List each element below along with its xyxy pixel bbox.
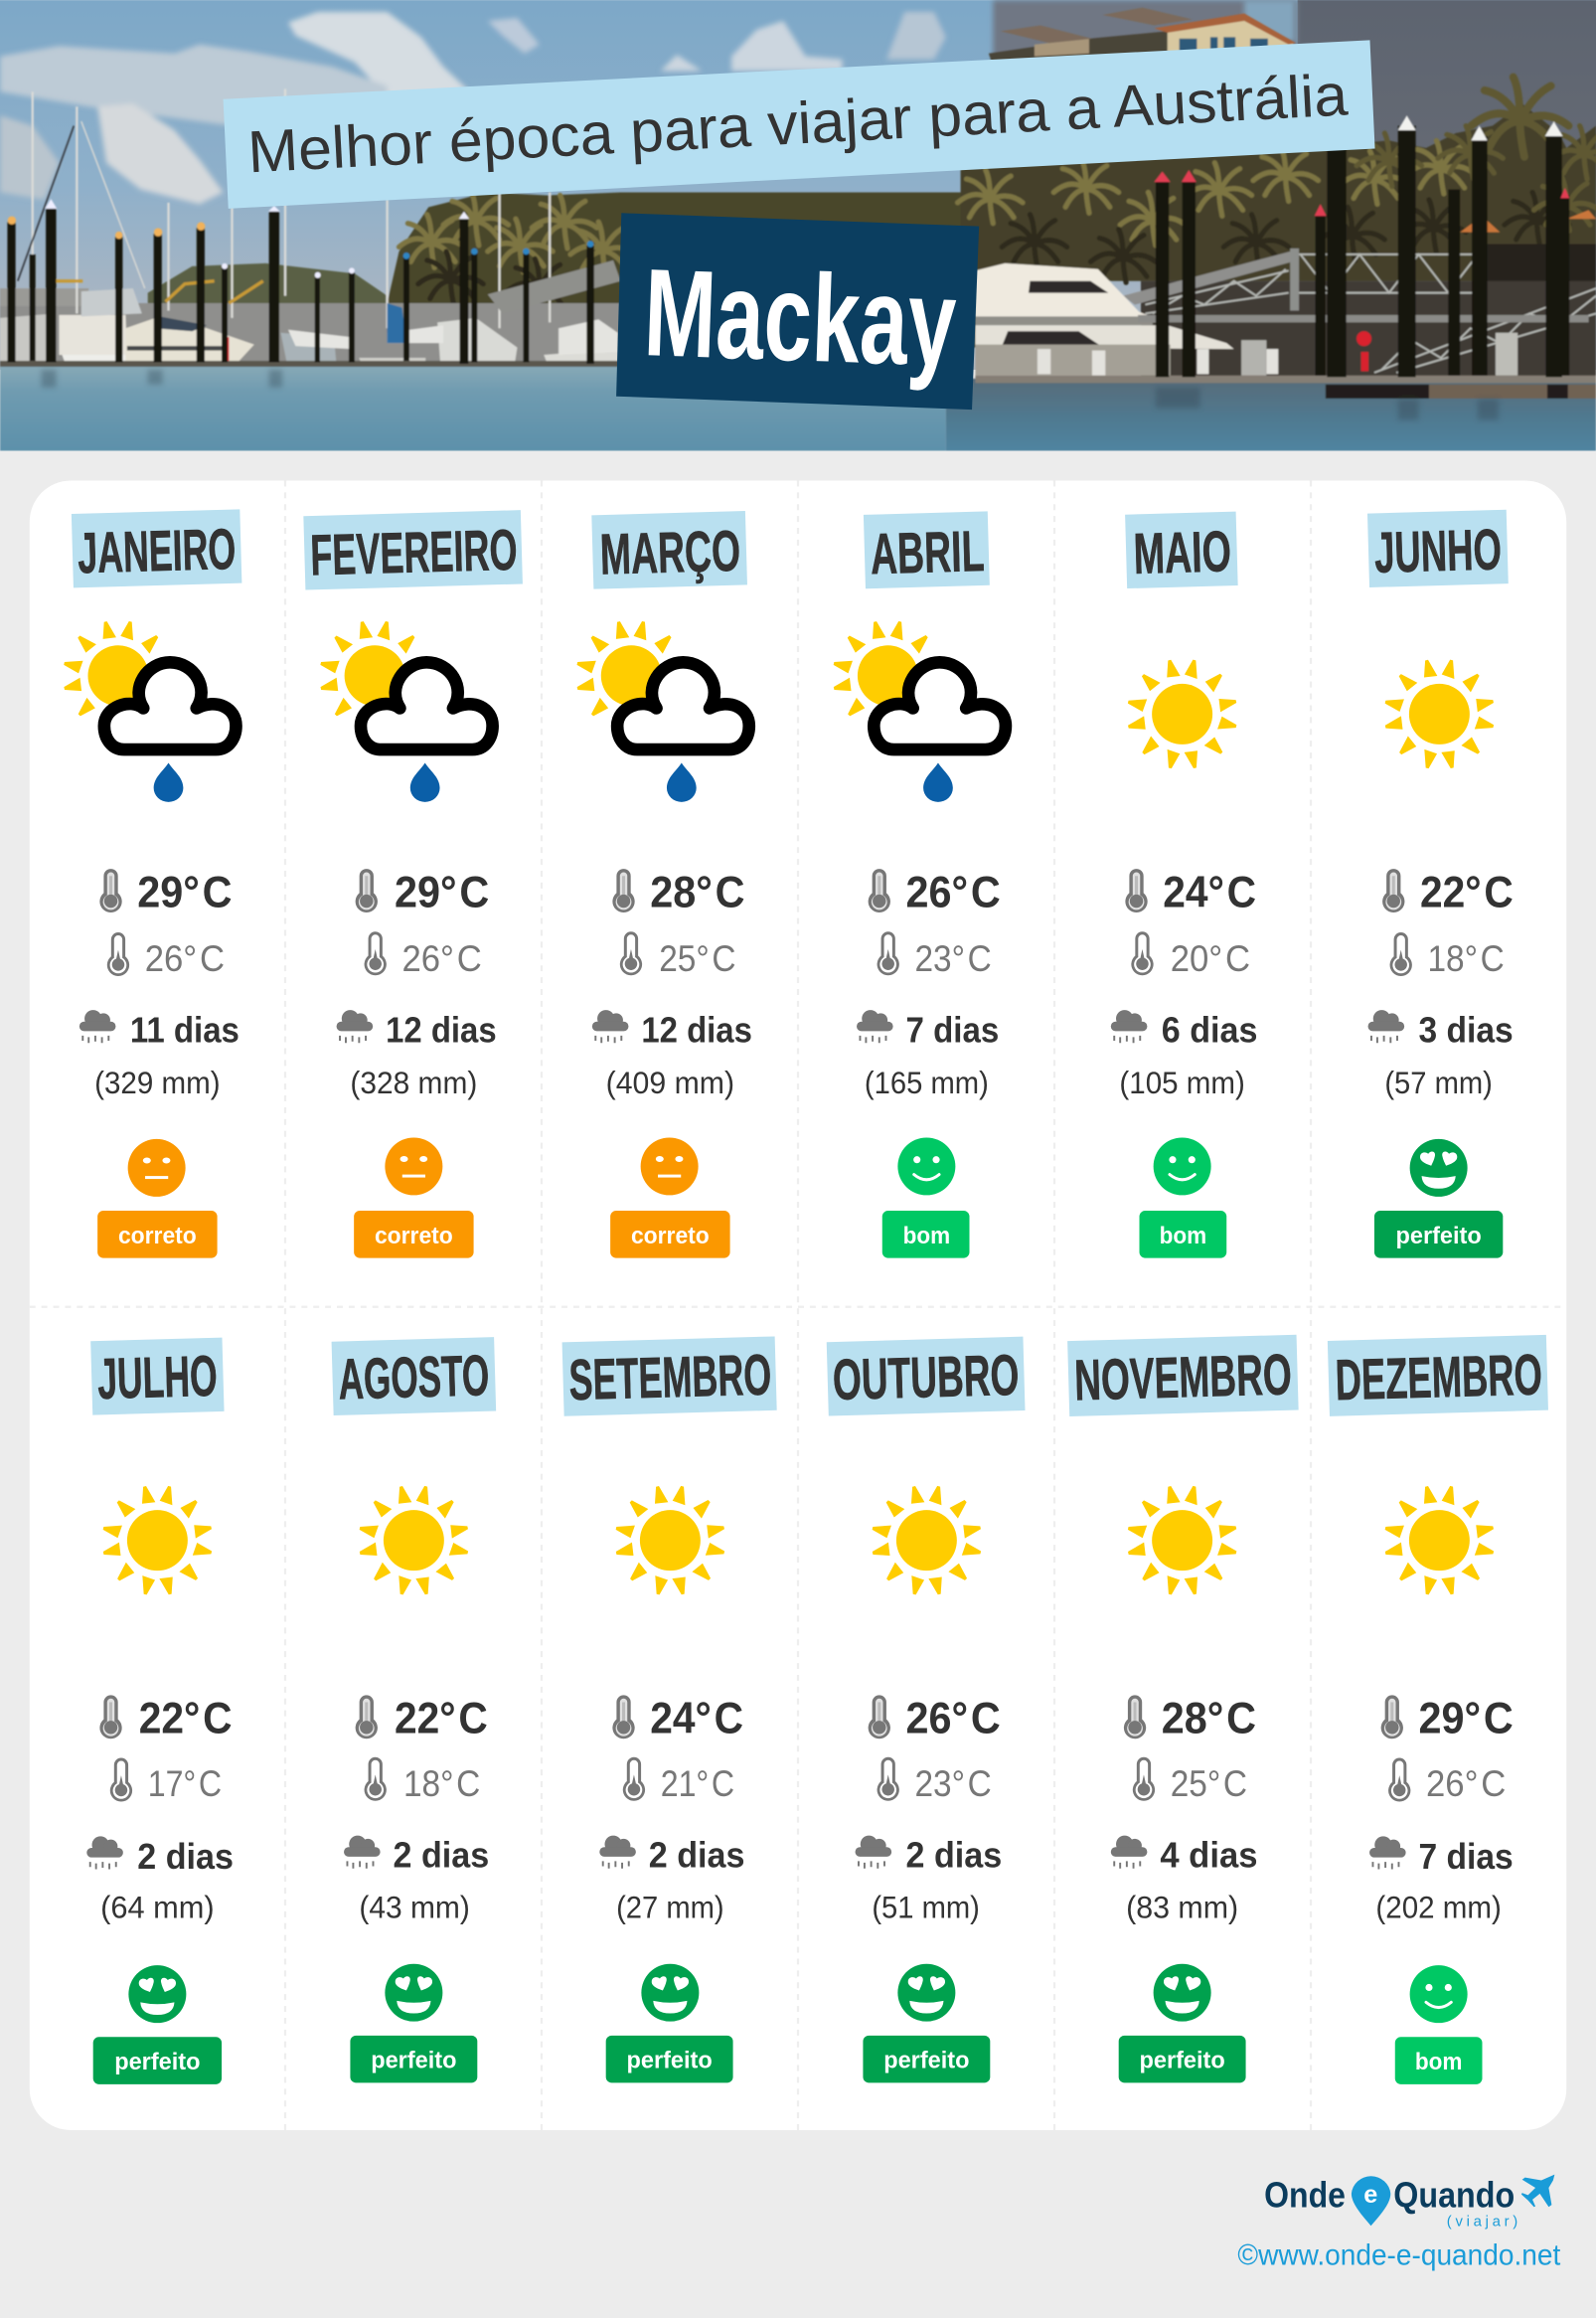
icon: happy face bbox=[1410, 1965, 1468, 2023]
icon: neutral face bbox=[385, 1137, 442, 1195]
icon: high temperature bbox=[1382, 869, 1404, 912]
icon: low temperature bbox=[1131, 931, 1154, 975]
icon: sun bbox=[1127, 659, 1237, 769]
cell: agosto bbox=[332, 1337, 496, 2082]
icon: sun bbox=[102, 1485, 213, 1595]
rating badge bbox=[1395, 2037, 1482, 2084]
high temperature: 26°C bbox=[906, 868, 1001, 916]
low temperature: 26°C bbox=[1426, 1762, 1506, 1804]
icon: high temperature bbox=[356, 1695, 378, 1738]
icon: low temperature bbox=[365, 931, 387, 975]
cell: março bbox=[575, 511, 752, 1258]
month label: MAIO bbox=[1133, 520, 1232, 586]
high temperature: 29°C bbox=[395, 868, 489, 916]
icon: high temperature bbox=[99, 1695, 122, 1738]
walkway and truss bbox=[1123, 251, 1298, 304]
low temperature: 21°C bbox=[661, 1762, 734, 1804]
rating badge: correto bbox=[375, 1223, 453, 1249]
icon: low temperature bbox=[365, 1757, 387, 1801]
icon: rain bbox=[592, 1010, 628, 1043]
rainy days: 12 dias bbox=[386, 1011, 497, 1051]
month label: NOVEMBRO bbox=[1073, 1343, 1293, 1412]
month label: FEVEREIRO bbox=[310, 519, 518, 588]
month label: JULHO bbox=[96, 1345, 219, 1411]
rainy days: 4 dias bbox=[1160, 1835, 1257, 1875]
icon: happy face bbox=[1154, 1137, 1211, 1195]
icon: sun bbox=[1384, 1485, 1495, 1595]
cell: julho bbox=[86, 1338, 234, 2084]
icon: neutral face bbox=[641, 1137, 699, 1195]
icon: neutral face bbox=[128, 1139, 186, 1197]
month label: SETEMBRO bbox=[568, 1344, 772, 1412]
icon: low temperature bbox=[878, 931, 899, 975]
icon: delighted face bbox=[641, 1964, 699, 2022]
icon: sun bbox=[1127, 1485, 1237, 1595]
rating badge: bom bbox=[1160, 1223, 1206, 1249]
cell: novembro bbox=[1067, 1335, 1299, 2082]
high temperature: 29°C bbox=[137, 868, 232, 916]
logo word: Onde: Onde bbox=[1264, 2175, 1346, 2215]
icon: high temperature bbox=[1125, 869, 1148, 912]
high temperature: 26°C bbox=[906, 1695, 1001, 1743]
rating badge bbox=[1140, 1211, 1226, 1258]
month label bbox=[90, 1338, 225, 1415]
logo: Onde e Quando viajar bbox=[1264, 2175, 1554, 2231]
title banner bbox=[224, 40, 1375, 209]
low temperature: 25°C bbox=[1171, 1762, 1247, 1804]
icon: rain bbox=[337, 1010, 373, 1043]
icon: delighted face bbox=[1154, 1964, 1211, 2022]
month label: ABRIL bbox=[870, 520, 985, 586]
icon: rain bbox=[599, 1836, 636, 1869]
month label: JUNHO bbox=[1373, 518, 1503, 585]
rainy days: 2 dias bbox=[137, 1837, 234, 1877]
icon: low temperature bbox=[110, 1758, 132, 1802]
month label: MARÇO bbox=[599, 520, 741, 587]
rainy days: 12 dias bbox=[641, 1011, 752, 1051]
rainfall: (105 mm) bbox=[1119, 1066, 1245, 1100]
panel: monthly climate card bbox=[30, 480, 1566, 2130]
rainfall: (328 mm) bbox=[350, 1066, 477, 1100]
month label: OUTUBRO bbox=[832, 1344, 1020, 1412]
rainfall: (83 mm) bbox=[1126, 1891, 1238, 1925]
header photo: marina bbox=[0, 0, 1596, 455]
icon: sun and rain cloud bbox=[575, 620, 749, 802]
month label bbox=[303, 510, 523, 590]
high temperature: 28°C bbox=[1162, 1695, 1256, 1743]
rating badge: perfeito bbox=[114, 2049, 200, 2075]
rating badge: perfeito bbox=[371, 2048, 456, 2074]
orange cranes bbox=[57, 281, 263, 303]
low temperature: 18°C bbox=[403, 1762, 480, 1804]
icon: high temperature bbox=[99, 869, 122, 912]
high temperature: 22°C bbox=[1420, 868, 1514, 916]
boats bbox=[0, 313, 57, 361]
low temperature: 23°C bbox=[914, 1762, 992, 1804]
month label bbox=[72, 509, 241, 587]
website url: ©www.onde-e-quando.net bbox=[1237, 2238, 1561, 2271]
mooring poles bbox=[7, 126, 1569, 377]
rainfall: (329 mm) bbox=[94, 1066, 221, 1100]
icon: happy face bbox=[897, 1137, 955, 1195]
low temperature: 26°C bbox=[145, 937, 225, 979]
high temperature: 24°C bbox=[1163, 868, 1256, 916]
icon: sun and rain cloud bbox=[63, 620, 236, 802]
rainy days: 2 dias bbox=[906, 1835, 1002, 1875]
rating badge bbox=[610, 1211, 730, 1258]
icon: high temperature bbox=[869, 869, 890, 912]
tree lines bbox=[148, 263, 388, 318]
rating badge: perfeito bbox=[883, 2048, 969, 2074]
icon: high temperature bbox=[869, 1695, 890, 1738]
cell: abril bbox=[833, 511, 1006, 1258]
cell: junho bbox=[1367, 510, 1514, 1258]
high temperature: 29°C bbox=[1419, 1695, 1514, 1743]
month label bbox=[591, 511, 747, 589]
clouds bbox=[0, 12, 946, 204]
distant boats band bbox=[0, 303, 621, 362]
city name: Mackay bbox=[642, 244, 958, 393]
low temperature: 20°C bbox=[1171, 937, 1250, 979]
rainfall: (51 mm) bbox=[872, 1891, 980, 1925]
rating badge: correto bbox=[631, 1223, 710, 1249]
cell: fevereiro bbox=[303, 510, 523, 1258]
city name banner bbox=[616, 213, 979, 410]
cell: janeiro bbox=[63, 509, 241, 1258]
icon: rain bbox=[857, 1010, 893, 1043]
icon: sun and rain cloud bbox=[833, 620, 1006, 802]
icon: delighted face bbox=[897, 1964, 955, 2022]
rating badge bbox=[354, 1211, 474, 1258]
icon: low temperature bbox=[878, 1757, 899, 1801]
icon: high temperature bbox=[356, 869, 378, 912]
icon: sun and rain cloud bbox=[319, 620, 493, 802]
rating badge bbox=[1119, 2036, 1246, 2082]
logo word: Quando: Quando bbox=[1393, 2175, 1515, 2215]
month label bbox=[1367, 510, 1509, 587]
icon: map pin bbox=[1352, 2176, 1390, 2226]
month label bbox=[332, 1337, 496, 1415]
rating badge bbox=[350, 2036, 477, 2082]
title text: Melhor época para viajar para a Austrália bbox=[246, 61, 1351, 185]
rainfall: (57 mm) bbox=[1384, 1066, 1493, 1100]
rainy days: 2 dias bbox=[394, 1835, 489, 1875]
month label: AGOSTO bbox=[338, 1344, 490, 1412]
rating badge: bom bbox=[1415, 2049, 1462, 2075]
icon: sun bbox=[615, 1485, 725, 1595]
rating badge bbox=[1374, 1211, 1503, 1258]
icon: delighted face bbox=[1410, 1139, 1468, 1197]
low temperature: 18°C bbox=[1427, 937, 1505, 979]
rating badge: perfeito bbox=[1140, 2048, 1225, 2074]
icon: sun bbox=[359, 1485, 469, 1595]
cell: maio bbox=[1111, 512, 1257, 1258]
icon: rain bbox=[1111, 1010, 1147, 1043]
rainy days: 3 dias bbox=[1419, 1011, 1514, 1051]
cell: outubro bbox=[827, 1337, 1026, 2082]
high temperature: 22°C bbox=[395, 1695, 488, 1743]
icon: sun bbox=[872, 1485, 982, 1595]
icon: delighted face bbox=[385, 1964, 442, 2022]
low temperature: 23°C bbox=[914, 937, 992, 979]
high temperature: 22°C bbox=[139, 1695, 232, 1743]
rating badge bbox=[93, 2037, 222, 2084]
icon: rain bbox=[1111, 1836, 1147, 1869]
icon: delighted face bbox=[128, 1965, 186, 2023]
rainy days: 11 dias bbox=[130, 1011, 239, 1051]
rainy days: 7 dias bbox=[1419, 1837, 1514, 1877]
rating badge bbox=[882, 1211, 969, 1258]
rating badge: correto bbox=[118, 1223, 197, 1249]
month label bbox=[827, 1337, 1026, 1416]
rainy days: 6 dias bbox=[1162, 1011, 1257, 1051]
month label bbox=[1125, 512, 1238, 588]
rainfall: (27 mm) bbox=[616, 1891, 724, 1925]
icon: rain bbox=[1369, 1836, 1406, 1870]
month label: JANEIRO bbox=[77, 518, 237, 585]
icon: airplane bbox=[1521, 2175, 1554, 2207]
icon: low temperature bbox=[107, 932, 129, 976]
rating badge bbox=[97, 1211, 218, 1258]
moored motor yacht bbox=[975, 263, 1168, 322]
icon: high temperature bbox=[612, 869, 635, 912]
high temperature: 28°C bbox=[650, 868, 744, 916]
rocks behind the dock bbox=[1141, 281, 1596, 379]
icon: high temperature bbox=[612, 1695, 635, 1738]
icon: rain bbox=[1368, 1010, 1404, 1043]
rating badge bbox=[863, 2036, 990, 2082]
rainy days: 2 dias bbox=[649, 1835, 744, 1875]
rainy days: 7 dias bbox=[906, 1011, 999, 1051]
icon: low temperature bbox=[1133, 1757, 1155, 1801]
month label bbox=[864, 511, 990, 588]
rainfall: (64 mm) bbox=[100, 1891, 215, 1925]
low temperature: 25°C bbox=[659, 937, 736, 979]
icon: rain bbox=[80, 1010, 115, 1043]
low temperature: 17°C bbox=[148, 1762, 222, 1804]
rainfall: (43 mm) bbox=[359, 1891, 470, 1925]
month label bbox=[1067, 1335, 1299, 1416]
rainfall: (409 mm) bbox=[606, 1066, 734, 1100]
icon: high temperature bbox=[1124, 1695, 1146, 1738]
rainfall: (165 mm) bbox=[865, 1066, 989, 1100]
low temperature: 26°C bbox=[401, 937, 482, 979]
rating badge: bom bbox=[903, 1223, 950, 1249]
icon: low temperature bbox=[1388, 1758, 1410, 1802]
rating badge: perfeito bbox=[1396, 1223, 1482, 1249]
rating badge bbox=[606, 2036, 733, 2082]
building bbox=[989, 31, 1168, 75]
rating badge: perfeito bbox=[627, 2048, 713, 2074]
icon: high temperature bbox=[1381, 1695, 1403, 1738]
icon: sun bbox=[1384, 659, 1495, 769]
cell: dezembro bbox=[1328, 1335, 1548, 2084]
logo tagline: ( v i a j a r ) bbox=[1447, 2215, 1517, 2231]
dock and pier bbox=[0, 361, 621, 368]
water bbox=[0, 367, 946, 451]
icon: low temperature bbox=[623, 1757, 645, 1801]
cell: setembro bbox=[562, 1336, 777, 2082]
high temperature: 24°C bbox=[650, 1695, 743, 1743]
icon: rain bbox=[344, 1836, 381, 1869]
icon: low temperature bbox=[1390, 932, 1412, 976]
month label bbox=[562, 1336, 777, 1416]
rainfall: (202 mm) bbox=[1375, 1891, 1502, 1925]
icon: low temperature bbox=[620, 931, 642, 975]
icon: rain bbox=[856, 1836, 891, 1869]
icon: rain bbox=[86, 1836, 123, 1870]
icon: map pin: e bbox=[1363, 2181, 1377, 2209]
